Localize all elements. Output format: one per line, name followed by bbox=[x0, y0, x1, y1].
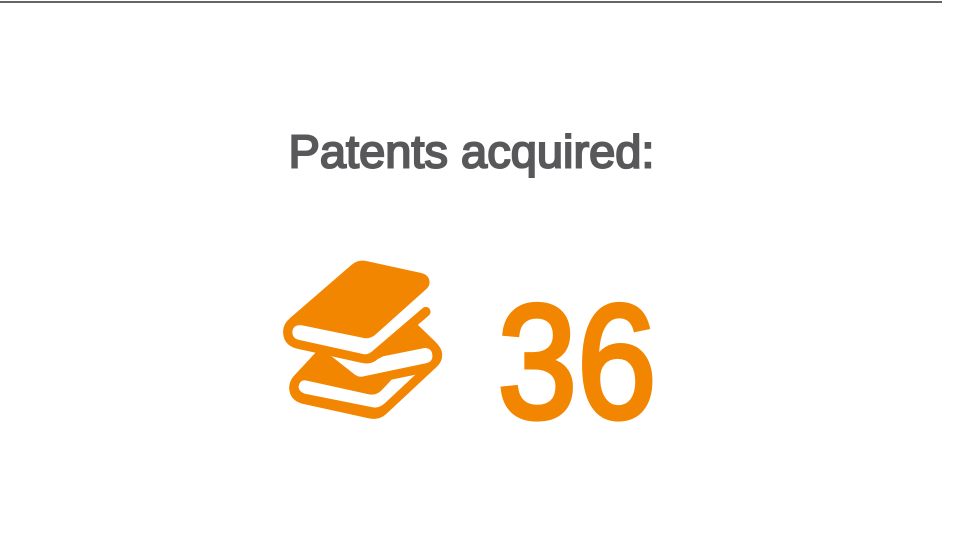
upper book bbox=[283, 261, 430, 363]
icon: stacked books bbox=[283, 261, 442, 419]
title: Patents acquired: bbox=[288, 126, 654, 178]
patent count: 36 bbox=[498, 272, 656, 452]
lower book bbox=[289, 324, 442, 419]
top rule bbox=[0, 1, 942, 3]
